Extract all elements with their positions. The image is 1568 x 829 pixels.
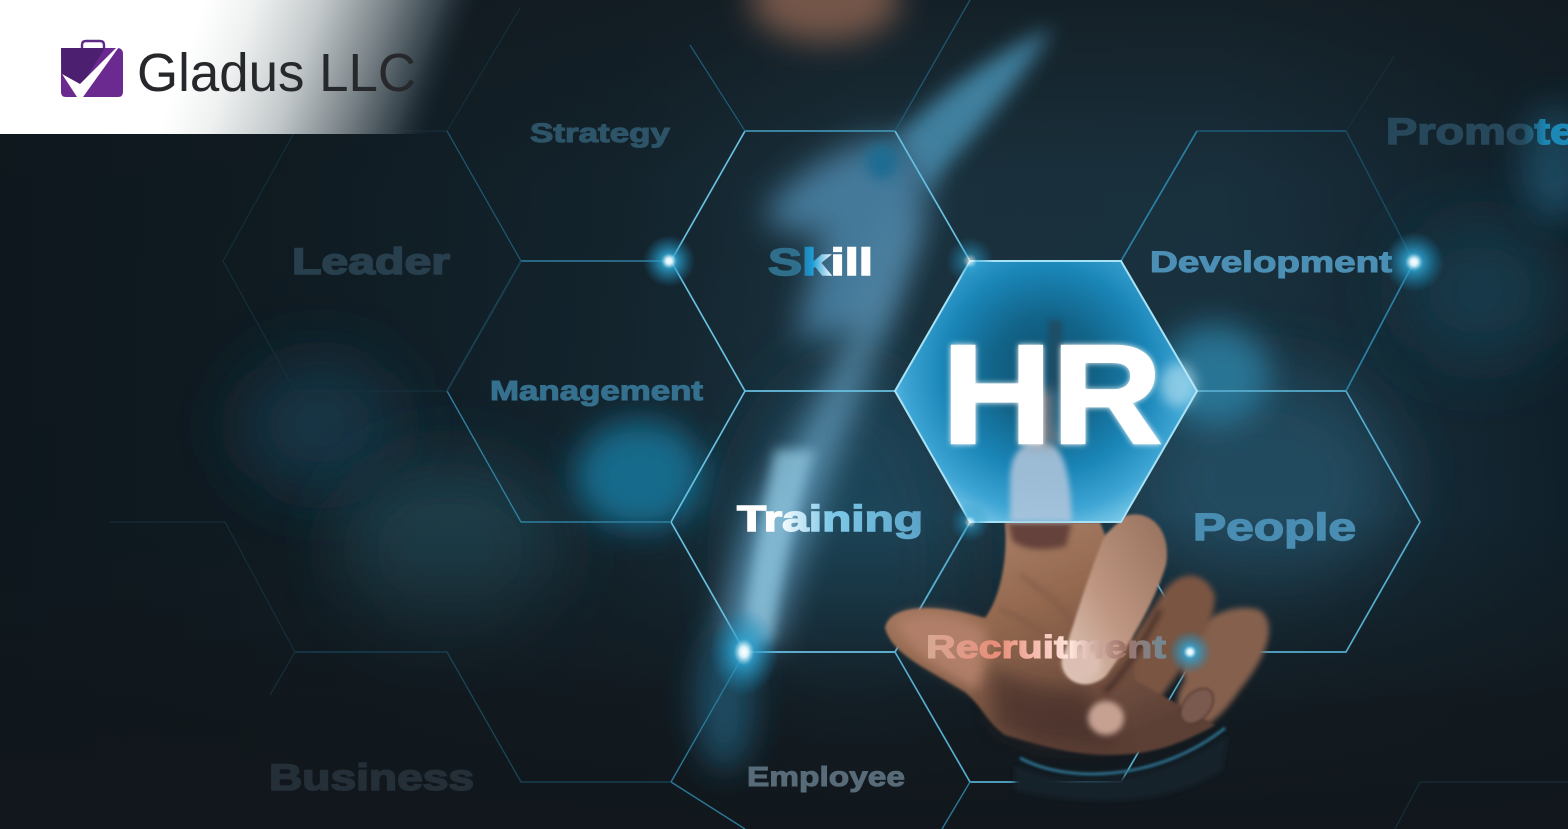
word: Skill: Skill <box>768 242 873 284</box>
word: Development: Development <box>1150 246 1392 279</box>
middle finger <box>1062 514 1167 684</box>
ring finger <box>1090 576 1215 738</box>
glowing nodes <box>643 232 1444 696</box>
word: Business: Business <box>269 757 474 798</box>
gap between fingers <box>1105 610 1160 692</box>
HR heading: HR <box>942 315 1162 473</box>
dark tie shape behind letters <box>1048 320 1062 390</box>
chin <box>750 0 900 42</box>
central HR hexagon <box>895 261 1197 522</box>
word: Promote: Promote <box>1386 111 1568 152</box>
word: Employee: Employee <box>747 761 905 792</box>
index finger shadow <box>1008 522 1072 549</box>
palm and thumb <box>885 522 1215 755</box>
sleeve cuff <box>1020 728 1225 774</box>
header logo band <box>0 0 500 134</box>
thumb highlight <box>895 613 987 690</box>
sleeve <box>1015 735 1228 801</box>
ring fingertip <box>1088 701 1124 735</box>
knuckle crease <box>1000 575 1076 655</box>
word: Recruitment: Recruitment <box>926 629 1166 665</box>
fingertip seen through hexagon <box>1010 442 1072 522</box>
palm shadow <box>990 665 1120 745</box>
word: Strategy: Strategy <box>530 118 670 148</box>
word: People: People <box>1193 507 1356 549</box>
hand <box>885 514 1269 801</box>
logo wordmark: Gladus LLC <box>137 43 416 103</box>
pinky nail <box>1174 682 1220 730</box>
collar and tie <box>895 28 1052 190</box>
icon: purple briefcase with check <box>61 40 124 97</box>
word: Management: Management <box>490 375 703 406</box>
pinky finger <box>1175 608 1269 728</box>
word: Training: Training <box>737 498 923 539</box>
word: Leader: Leader <box>292 241 450 282</box>
